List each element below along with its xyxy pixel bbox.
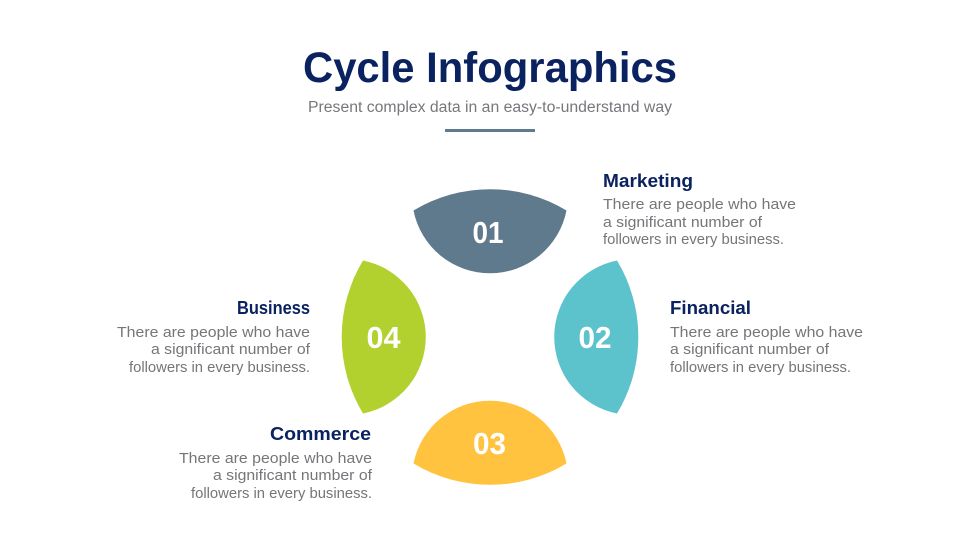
text block: Commerce: a significant number of — [213, 467, 373, 484]
segment 02: 02 — [578, 320, 612, 355]
text block: Marketing: followers in every business. — [603, 231, 784, 248]
segment 03 — [414, 401, 566, 485]
text block: Financial: There are people who have — [670, 324, 863, 341]
text block: Business: Business — [237, 298, 310, 318]
title: Cycle Infographics — [303, 44, 677, 92]
text block: Commerce: Commerce — [270, 424, 371, 444]
text block: Marketing — [603, 171, 796, 248]
segment 04: 04 — [366, 320, 401, 355]
text block: Financial — [670, 298, 863, 376]
segment 02 — [554, 260, 638, 414]
subtitle: Present complex data in an easy-to-understand way — [308, 99, 672, 116]
text block: Financial: followers in every business. — [670, 359, 851, 376]
text block: Marketing: a significant number of — [603, 214, 763, 231]
segment 03: 03 — [473, 426, 506, 461]
text block: Business: followers in every business. — [129, 359, 310, 376]
segment 01: 01 — [472, 215, 504, 250]
title underline — [445, 129, 535, 132]
text block: Commerce — [179, 424, 373, 502]
text block: Financial: Financial — [670, 298, 751, 318]
text block: Business — [117, 298, 311, 376]
text block: Commerce: There are people who have — [179, 450, 372, 467]
text block: Business: a significant number of — [151, 341, 311, 358]
text block: Marketing: There are people who have — [603, 196, 796, 213]
text block: Financial: a significant number of — [670, 341, 830, 358]
text block: Commerce: followers in every business. — [191, 485, 372, 502]
segment 01 — [414, 189, 566, 273]
text block: Business: There are people who have — [117, 324, 310, 341]
segment 04 — [342, 260, 426, 414]
text block: Marketing: Marketing — [603, 171, 693, 191]
